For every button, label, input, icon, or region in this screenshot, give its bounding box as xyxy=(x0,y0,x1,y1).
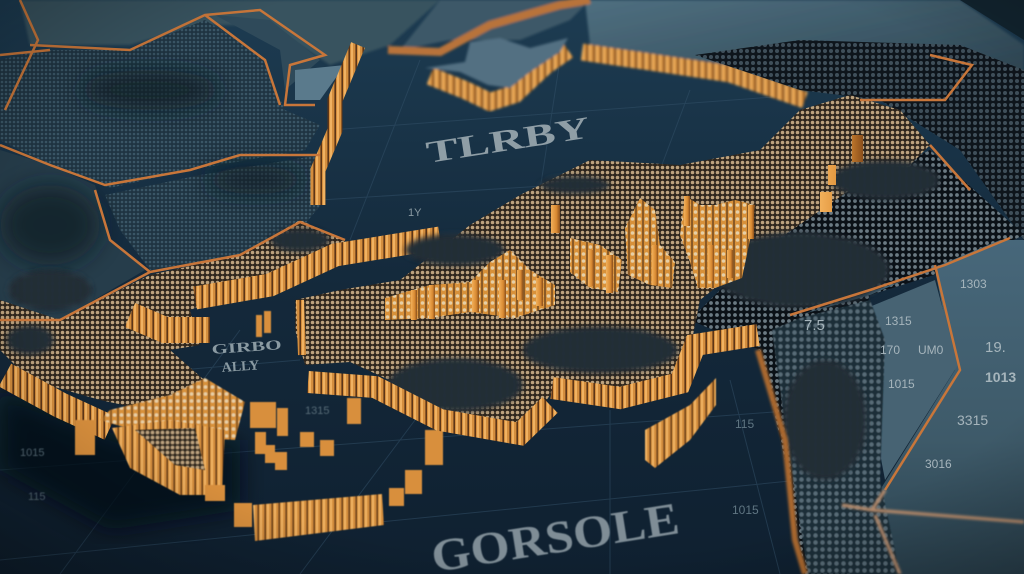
dark patches on Anatolia xyxy=(387,160,940,412)
borders: north-west xyxy=(0,0,345,320)
borders: east xyxy=(790,55,1010,490)
numeric labels west: 1315 xyxy=(305,405,329,417)
land: Balkan and Greek mainland xyxy=(0,220,345,425)
map labels xyxy=(20,110,1016,574)
studs: eastern cluster west xyxy=(625,198,675,288)
top right corner shade xyxy=(960,0,1024,40)
land: Anatolia xyxy=(295,95,930,440)
top land band xyxy=(20,0,1024,102)
numeric labels east: 7.5 xyxy=(804,317,825,334)
land: west slate region xyxy=(0,150,145,320)
studs: western cluster xyxy=(385,250,555,320)
land: upper central strip xyxy=(400,0,590,50)
Balkan north coast wall xyxy=(195,238,440,298)
numeric labels east: 3315 xyxy=(957,412,988,428)
orange bars xyxy=(411,135,863,320)
land: eastern blue dots xyxy=(772,300,900,574)
label: GIRBO: GIRBO xyxy=(211,338,282,358)
bars: north-eastern spikes xyxy=(820,135,863,212)
bars: highlights xyxy=(411,196,754,320)
land: central-west slate region xyxy=(105,155,325,270)
Greek coast wall xyxy=(5,375,110,428)
numeric labels east: 1303 xyxy=(960,277,987,291)
borders: south-east xyxy=(842,490,1024,574)
numeric labels east xyxy=(804,277,1016,471)
numeric labels west xyxy=(20,405,329,503)
land: north-west slate region xyxy=(0,20,320,188)
label: ALLY: ALLY xyxy=(221,358,260,376)
land: north small slate xyxy=(215,15,320,90)
numeric labels east: 1315 xyxy=(885,314,912,328)
eastern coast wall xyxy=(758,350,805,574)
numeric labels east: UM0 xyxy=(918,343,944,357)
Balkan small peninsula wall xyxy=(130,315,210,330)
land: upper right slate xyxy=(585,0,1024,90)
Anatolia south coast wall xyxy=(308,382,550,434)
numeric labels east: 1015 xyxy=(888,377,915,391)
numeric labels east: 19. xyxy=(985,339,1006,356)
Peloponnese xyxy=(112,420,225,495)
studs: eastern cluster east xyxy=(680,196,755,288)
land: northern light patch xyxy=(295,65,345,100)
numeric labels east: 3016 xyxy=(925,457,952,471)
numeric labels south: 1015 xyxy=(732,503,759,517)
northern coast wall xyxy=(582,52,805,100)
Anatolia west coast wall xyxy=(300,300,302,355)
sea shadow under Balkans xyxy=(0,390,240,530)
numeric labels south xyxy=(732,417,759,517)
orange stud clusters xyxy=(385,196,755,320)
island: Crete xyxy=(253,494,384,541)
label: TLRBY: TLRBY xyxy=(424,110,592,170)
Peloponnese centre xyxy=(135,428,205,470)
upper coast wall xyxy=(388,0,590,52)
land: Crimea peninsula xyxy=(425,38,568,88)
dark patch Balkan xyxy=(6,228,330,355)
numeric labels west: 115 xyxy=(28,491,46,503)
land: eastern dark land xyxy=(690,150,1024,574)
island group: Aegean xyxy=(75,311,443,527)
numeric labels east: 1013 xyxy=(985,369,1016,385)
coast wall north-west xyxy=(318,45,358,205)
land: eastern dark mottling xyxy=(783,360,867,480)
Greek orange cluster xyxy=(100,378,245,440)
land: eastern sea panel xyxy=(800,240,1024,574)
Anatolia south-east coast wall xyxy=(552,335,758,398)
label: 1Y: 1Y xyxy=(408,207,422,219)
numeric labels south: 115 xyxy=(735,417,754,431)
numeric labels east: 170 xyxy=(880,343,900,357)
dark texture patches north-west xyxy=(0,70,305,265)
studs: central cluster xyxy=(570,238,622,292)
sea grid lines xyxy=(0,60,800,574)
islands xyxy=(75,311,716,541)
numeric labels west: 1015 xyxy=(20,447,44,459)
land: northern shore xyxy=(20,0,440,65)
land: Crimea peninsula wall xyxy=(430,50,568,102)
island: Cyprus xyxy=(645,378,716,468)
land: upper right dark dotted xyxy=(695,40,1024,240)
land: south-east slate strip xyxy=(850,280,958,480)
